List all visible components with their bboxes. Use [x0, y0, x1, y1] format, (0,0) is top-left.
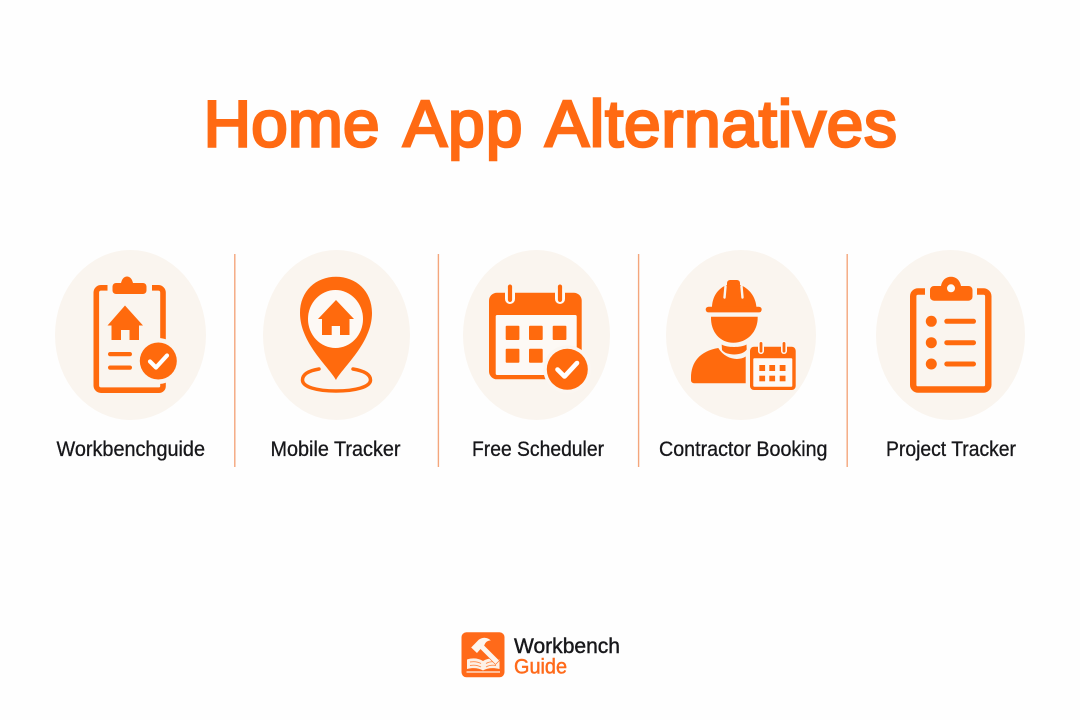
icon: clipboard with house and check [96, 276, 181, 390]
title: Alternatives [545, 86, 898, 160]
icon: calendar with check [489, 284, 591, 393]
panel: Contractor Booking [666, 250, 816, 420]
panel: Mobile Tracker [263, 250, 410, 420]
brand name accent: Guide [514, 654, 567, 678]
title: App [403, 86, 543, 160]
label: Mobile Tracker: Mobile Tracker [270, 437, 400, 461]
label: Contractor Booking: Contractor Booking [659, 437, 828, 461]
panel: Free Scheduler [463, 250, 610, 420]
panel: Workbenchguide [55, 250, 206, 420]
title: Home [204, 86, 398, 160]
label: Project Tracker: Project Tracker [886, 437, 1016, 461]
icon: hammer and book [462, 632, 504, 677]
icon: clipboard checklist [913, 277, 988, 390]
logo: Workbench Guide [462, 632, 620, 678]
icon: location pin with house [300, 277, 372, 391]
icon: contractor with calendar [691, 280, 798, 392]
label: Free Scheduler: Free Scheduler [472, 437, 604, 461]
panel: Project Tracker [876, 250, 1025, 420]
brand name: Workbench [514, 634, 620, 658]
label: Workbenchguide: Workbenchguide [56, 437, 205, 461]
